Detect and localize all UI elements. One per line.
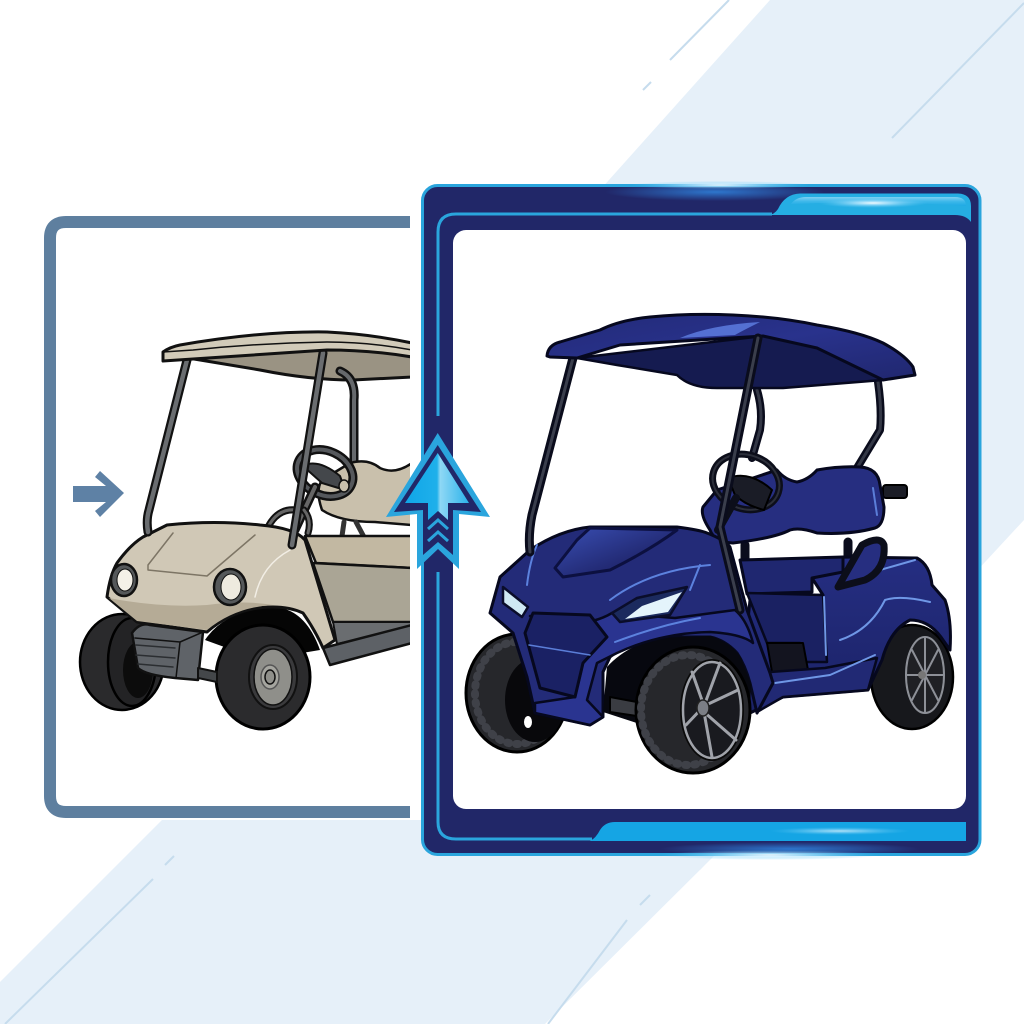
rear roof post [340,371,354,462]
seat supports [342,522,364,537]
fender band [530,610,753,725]
body highlights [775,560,930,683]
grille band [529,645,590,655]
seat back [318,461,412,525]
roof underside [577,336,883,388]
hood vent [555,528,677,577]
sill [323,625,412,665]
arrow outer [386,433,490,569]
front right wheel [636,647,750,773]
seat supports [745,542,848,562]
bottom blue band glow [660,842,920,856]
steering wheel [268,441,361,533]
right headlight [612,587,687,622]
cart body [107,522,335,648]
side panel under seat [747,593,827,662]
seat cushion [740,557,843,594]
right front wheel [216,625,310,729]
fender highlight [255,550,290,597]
top border glow [630,181,810,189]
icon: small right arrow [73,471,124,517]
body lower shade [109,598,273,630]
bumper [132,624,217,682]
left headlight [111,564,137,596]
arrow chevrons [428,520,448,541]
top blue band glow [605,183,825,201]
seat highlight [873,488,877,515]
seat back [702,467,884,543]
illustration: blue golf cart [466,314,953,773]
steering wheel [705,446,787,530]
hood sweep highlights [527,545,710,642]
roof highlight [680,322,760,338]
top tab highlight [791,197,966,206]
floor [767,643,808,672]
bottom border glow [660,850,880,860]
grille [525,613,607,697]
left front wheel [80,614,164,710]
wheel arch [205,608,320,652]
wheel arch [603,636,751,760]
seat peg [883,485,907,498]
center roof post [720,338,758,610]
sill [750,658,877,712]
top neon line [438,214,772,416]
top tab glow [818,198,928,208]
frame body [422,186,980,854]
left headlight [503,587,528,617]
roof top [547,314,915,380]
seat side panel [313,563,412,622]
arrow: central upgrade arrow [386,433,490,569]
right headlight [214,569,246,605]
front roof posts [147,353,323,545]
rear posts [752,382,881,468]
floor [333,622,412,644]
rear body [745,557,950,713]
front left wheel [466,634,568,752]
rear wheel [871,625,953,729]
bottom neon line [438,572,592,839]
panel: before frame [50,222,410,812]
under-bumper link [610,697,637,716]
bottom tab [590,822,966,841]
seat cushion [305,536,412,568]
frame inner window [453,230,966,809]
rear grab handle [838,540,884,587]
arrow dark core [394,445,481,555]
panel: after frame [422,181,980,860]
left roof post [529,358,573,552]
bottom tab glow [770,827,910,835]
roof top [163,332,412,361]
roof crease [163,342,412,352]
arrow fill [405,453,469,520]
roof underside [188,350,412,380]
illustration: beige golf cart [80,332,412,729]
right headlight lamp [625,592,682,619]
front body [490,527,773,725]
top tab [768,194,971,222]
hood crease [148,533,255,576]
